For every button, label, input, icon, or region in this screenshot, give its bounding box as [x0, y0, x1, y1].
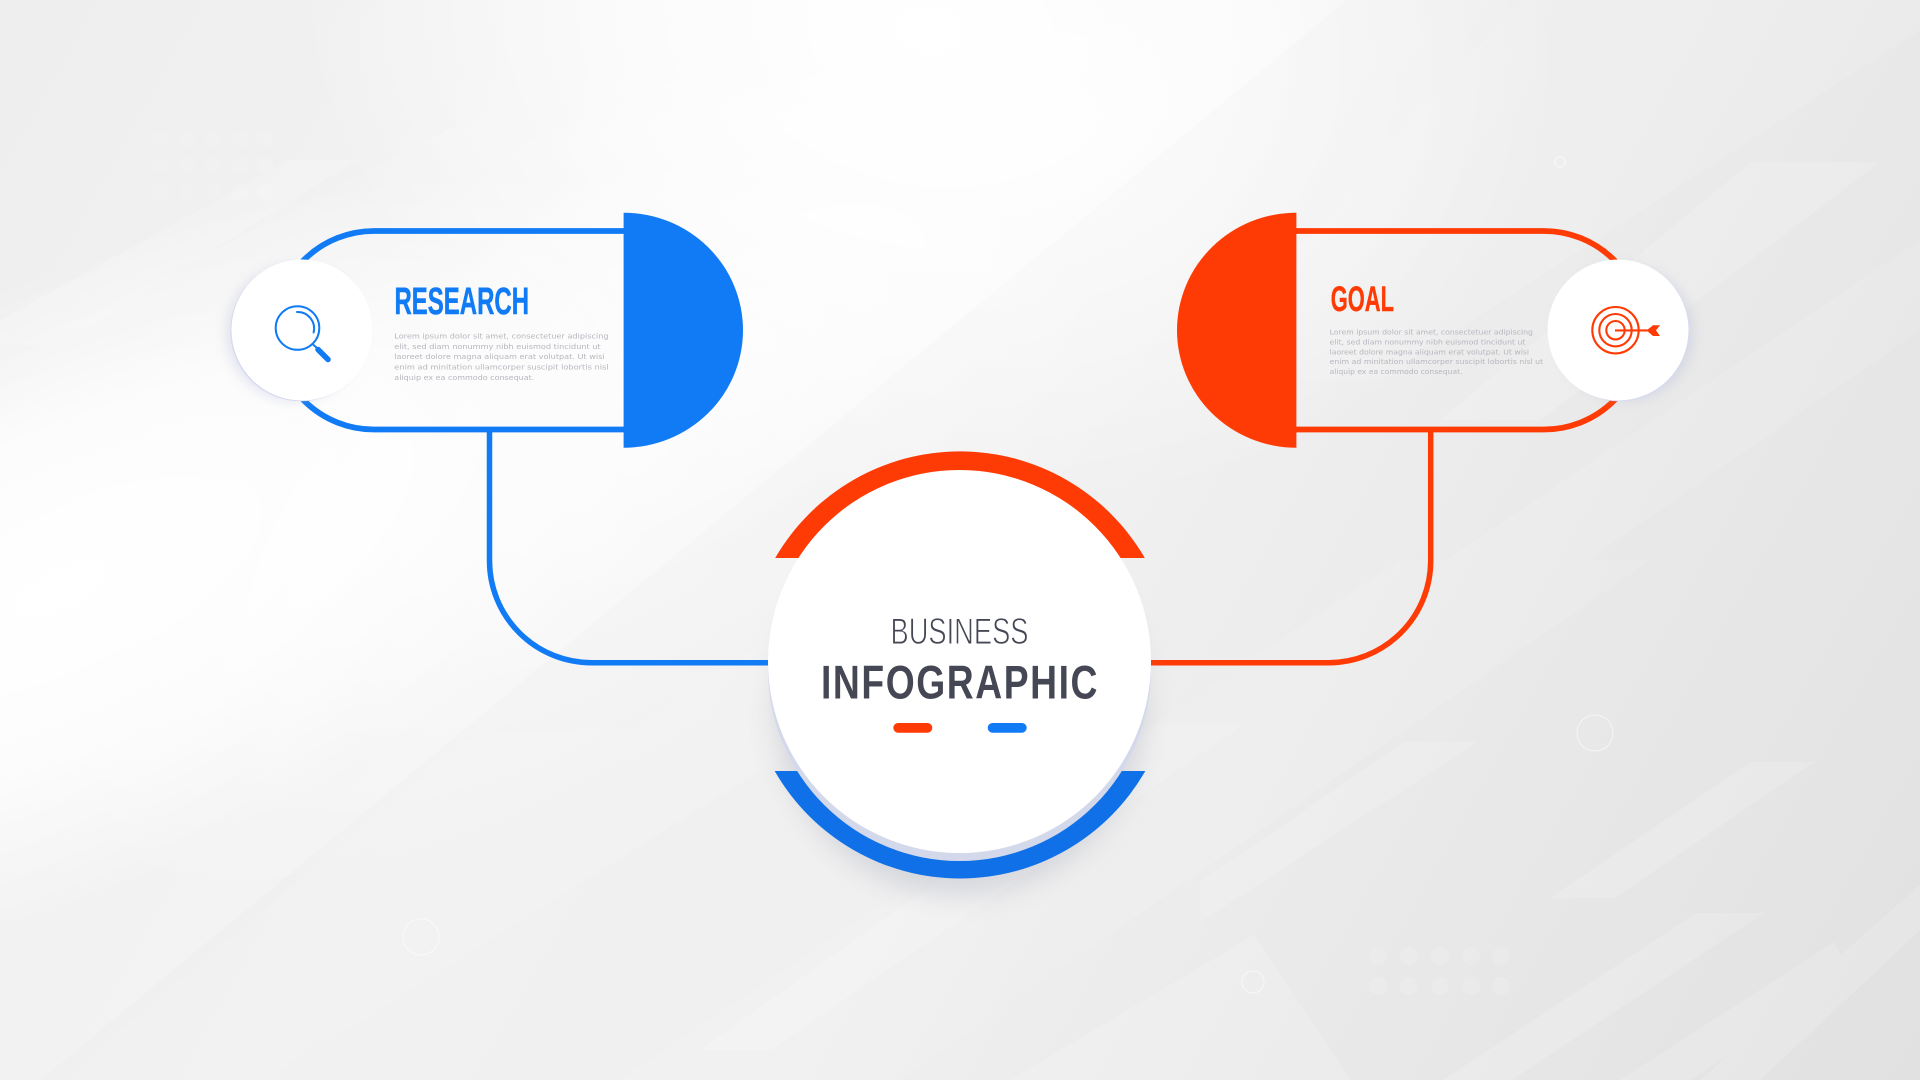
text block: goal: laoreet dolore magna aliquam erat volutpat. Ut wisi — [1330, 347, 1529, 356]
pill outline — [1296, 231, 1643, 430]
connector: research to center — [490, 432, 772, 663]
text block: goal — [1330, 328, 1543, 376]
text block: goal: Lorem ipsum dolor sit amet, consectetuer adipiscing — [1330, 328, 1533, 337]
text block: research: aliquip ex ea commodo consequat. — [394, 373, 534, 382]
heading: research: RESEARCH — [394, 281, 529, 323]
panel: research — [226, 213, 743, 448]
heading: goal: GOAL — [1331, 280, 1394, 319]
blue dash — [988, 723, 1027, 733]
icon: target with arrow — [1592, 307, 1660, 353]
title line 2: INFOGRAPHIC — [821, 656, 1099, 709]
half disk — [624, 213, 743, 448]
bottom arc — [775, 771, 1145, 878]
text block: research — [394, 332, 609, 382]
text block: research: enim ad minitation ullamcorper suscipit lobortis nisl — [394, 362, 609, 372]
panel: center badge — [768, 451, 1151, 895]
icon: magnifier — [276, 306, 328, 360]
disk rim — [768, 478, 1151, 861]
icon disk shadow — [1549, 260, 1694, 401]
half disk — [1177, 213, 1296, 448]
title line 1: BUSINESS — [890, 611, 1028, 652]
text block: research: laoreet dolore magna aliquam erat volutpat. Ut wisi — [394, 352, 605, 361]
badge shadow — [775, 515, 1145, 895]
red dash — [893, 723, 932, 733]
pill outline — [275, 231, 624, 430]
connector: goal to center — [1148, 432, 1431, 663]
text block: goal: aliquip ex ea commodo consequat. — [1330, 367, 1462, 376]
icon disk shadow — [226, 260, 371, 401]
panel: goal — [1177, 213, 1694, 448]
text block: goal: elit, sed diam nonummy nibh euismod tincidunt ut — [1330, 338, 1526, 346]
top arc — [775, 451, 1145, 558]
text block: research: Lorem ipsum dolor sit amet, consectetuer adipiscing — [394, 332, 609, 340]
text block: research: elit, sed diam nonummy nibh euismod tincidunt ut — [394, 342, 601, 351]
text block: goal: enim ad minitation ullamcorper suscipit lobortis nisl ut — [1330, 357, 1543, 366]
icon disk — [1548, 260, 1688, 400]
white disk — [768, 470, 1151, 853]
icon disk — [232, 260, 372, 400]
